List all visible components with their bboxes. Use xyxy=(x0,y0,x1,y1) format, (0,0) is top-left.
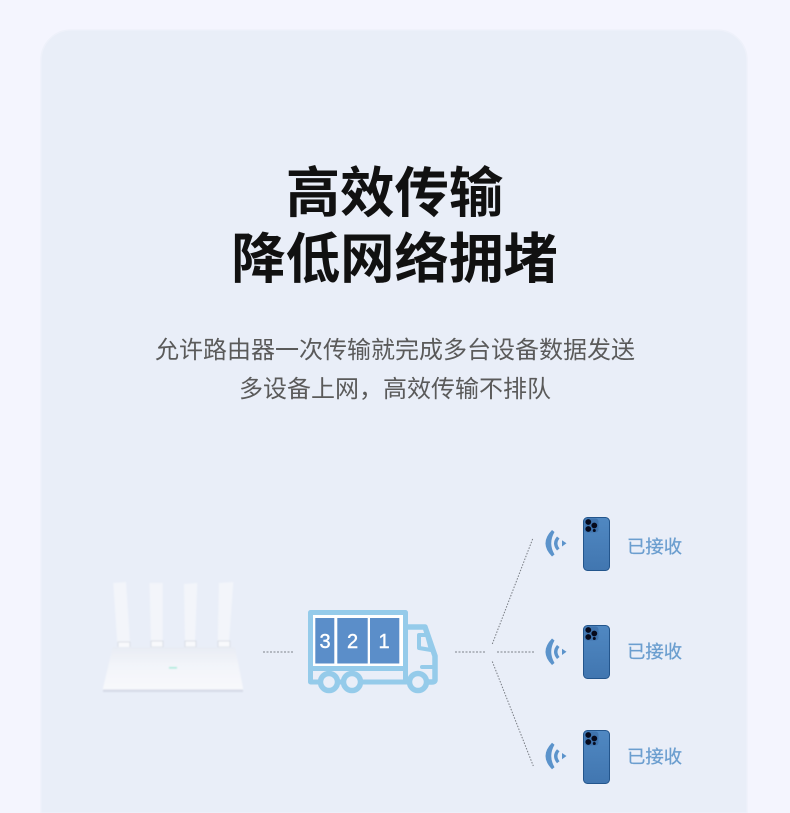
cargo box frame xyxy=(310,612,406,668)
connector: router to truck xyxy=(263,651,294,653)
antenna 4 xyxy=(218,582,233,642)
icon: phone xyxy=(584,518,610,570)
antenna 2 xyxy=(150,583,163,642)
title: 高效传输 xyxy=(286,163,503,224)
truck icon xyxy=(310,612,435,690)
cargo block 1: 1 xyxy=(378,631,390,653)
branch line: lower xyxy=(492,662,533,766)
branch line: middle xyxy=(497,651,535,653)
cab window xyxy=(419,635,431,650)
label: received: 已接收 xyxy=(627,641,682,662)
icon: signal waves xyxy=(546,638,566,665)
status LED xyxy=(169,667,177,669)
title: 降低网络拥堵 xyxy=(231,229,558,290)
antenna 1 xyxy=(113,582,130,643)
router illustration xyxy=(103,582,243,692)
antenna hinges xyxy=(118,641,230,648)
label: received: 已接收 xyxy=(627,536,682,557)
connector: truck to branches xyxy=(455,651,486,653)
description text xyxy=(155,337,635,403)
cab bumper xyxy=(422,665,434,669)
cab xyxy=(407,627,435,682)
icon: signal waves xyxy=(546,743,566,769)
icon: phone xyxy=(584,730,610,784)
antenna 3 xyxy=(184,583,197,642)
label: received: 已接收 xyxy=(627,746,682,767)
description text: 多设备上网，高效传输不排队 xyxy=(239,376,551,403)
icon: signal waves xyxy=(546,530,566,556)
icon: phone xyxy=(584,626,610,678)
truck wheels xyxy=(320,674,426,690)
receiver row 3 xyxy=(546,730,682,784)
branch line: upper xyxy=(492,538,533,644)
router body xyxy=(103,647,243,690)
cargo block 3: 3 xyxy=(319,631,331,653)
receiver row 2 xyxy=(546,626,682,678)
title xyxy=(231,163,558,290)
router base shadow xyxy=(103,690,243,692)
receiver row 1 xyxy=(546,518,682,570)
description text: 允许路由器一次传输就完成多台设备数据发送 xyxy=(155,337,635,364)
chassis xyxy=(310,668,408,682)
cargo block 2: 2 xyxy=(347,631,358,653)
